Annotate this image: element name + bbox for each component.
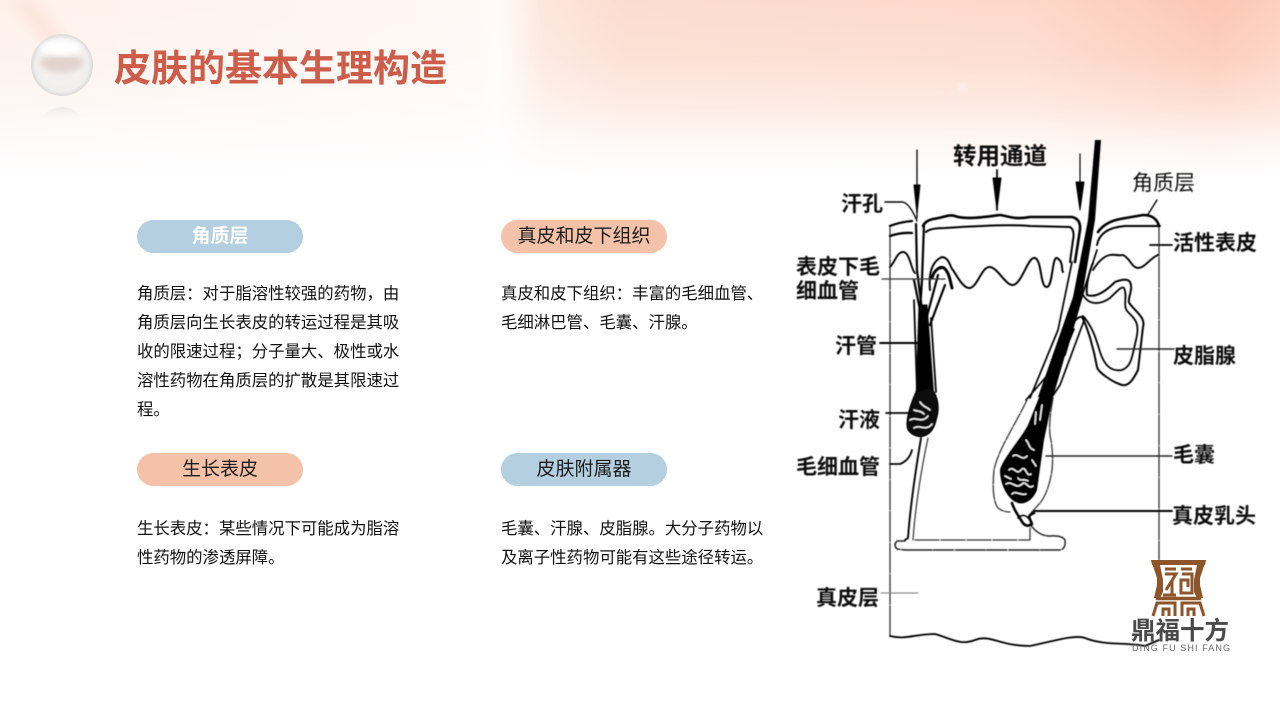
diagram labels: 角质层 [1132,172,1195,195]
text: stratum corneum [137,284,399,418]
panel: skin appendages [501,453,763,566]
text: viable epidermis: 性药物的渗透屏障。 [137,548,285,566]
text: stratum corneum: 溶性药物在角质层的扩散是其限速过 [137,372,399,390]
panel: stratum corneum [137,220,399,418]
heading: stratum corneum: 角质层 [191,226,248,247]
logo latin text: DING FU SHI FANG [1132,643,1231,653]
diagram labels [796,143,1257,610]
panel: viable epidermis [137,453,399,566]
diagram labels: 细血管 [796,280,859,303]
diagram drawing [880,140,1174,646]
heading: stratum corneum [137,220,303,253]
diagram labels: 转用通道 [953,143,1047,169]
logo: Ding Fu Shi Fang [1131,560,1231,653]
diagram labels: 皮脂腺 [1173,345,1236,368]
heading: viable epidermis [137,453,303,486]
heading: dermis [501,220,667,253]
diagram labels: 毛囊 [1173,444,1215,467]
text: viable epidermis [137,520,399,566]
diagram labels: 活性表皮 [1173,232,1257,255]
panel: dermis and subcutaneous tissue [501,220,763,332]
diagram labels: 汗液 [838,409,880,432]
text: stratum corneum: 收的限速过程；分子量大、极性或水 [137,342,399,360]
diagram labels: 真皮层 [816,587,879,610]
text: dermis: 真皮和皮下组织：丰富的毛细血管、 [501,284,763,302]
heading: viable epidermis: 生长表皮 [182,459,258,480]
diagram labels: 汗管 [835,335,877,358]
diagram labels: 毛细血管 [796,456,880,479]
heading: appendages [501,453,667,486]
text: dermis: 毛细淋巴管、毛囊、汗腺。 [501,314,698,332]
diagram labels: 真皮乳头 [1172,505,1256,528]
text: stratum corneum: 角质层：对于脂溶性较强的药物，由 [137,284,399,302]
text: stratum corneum: 程。 [137,400,170,418]
text: viable epidermis: 生长表皮：某些情况下可能成为脂溶 [137,520,399,538]
text: appendages: 及离子性药物可能有这些途径转运。 [501,548,763,566]
heading: appendages: 皮肤附属器 [536,459,632,480]
diagram labels: 表皮下毛 [796,256,880,279]
diagram labels: 汗孔 [841,193,883,216]
text: appendages: 毛囊、汗腺、皮脂腺。大分子药物以 [501,520,763,538]
background: peach header wash [0,0,1280,158]
icon: pearl with reflection [31,34,93,112]
logo wordmark: 鼎福十方 [1131,616,1229,645]
title: 皮肤的基本生理构造 [114,48,447,89]
heading: dermis: 真皮和皮下组织 [517,226,650,247]
text: appendages [501,520,763,566]
text: stratum corneum: 角质层向生长表皮的转运过程是其吸 [137,314,399,332]
text: dermis [501,284,763,332]
